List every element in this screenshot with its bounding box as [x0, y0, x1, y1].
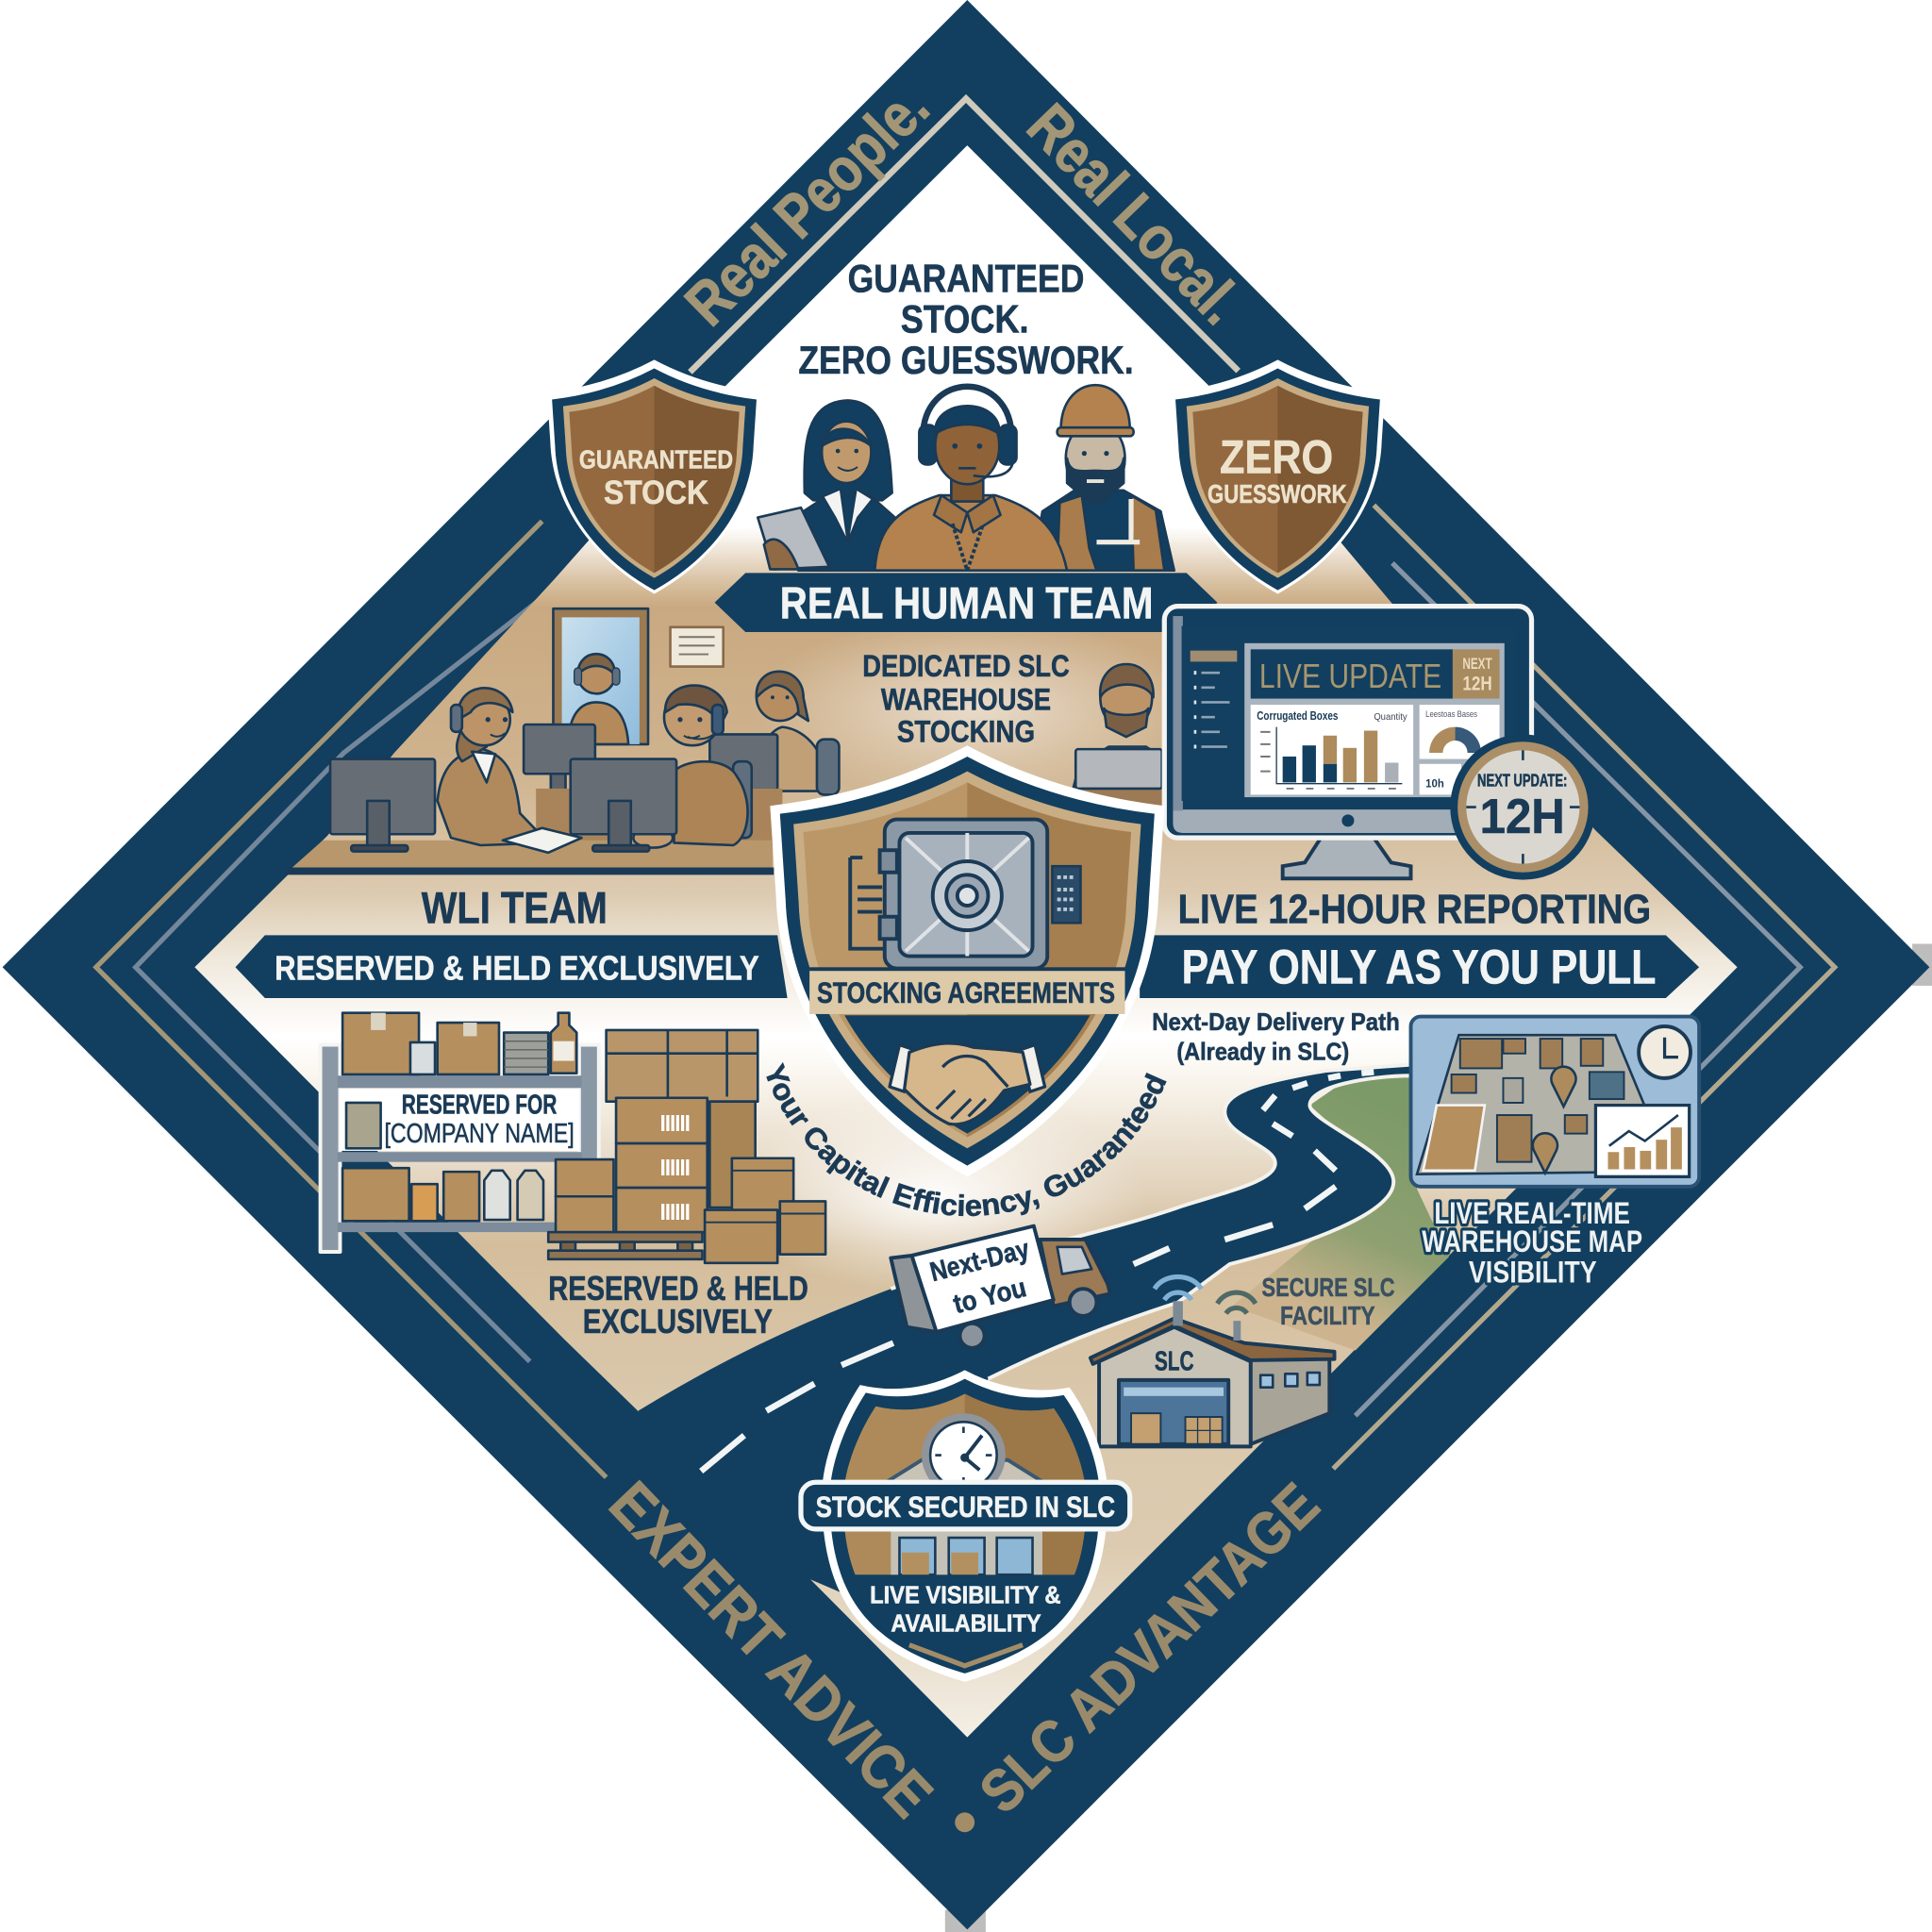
- shield: zero guesswork: [1171, 359, 1385, 594]
- building and clock: [882, 1460, 1047, 1516]
- grey stubs at edges: [945, 943, 1932, 1932]
- label: reserved and held exclusively: RESERVED & HELD: [548, 1269, 808, 1307]
- live visibility text: [870, 1580, 1061, 1637]
- stocking agreements strip: STOCKING AGREEMENTS: [817, 976, 1115, 1009]
- worker with hard hat: [1033, 385, 1174, 571]
- frame: chevron stripes: [96, 98, 1835, 1477]
- label: dedicated SLC warehouse stocking: DEDICATED SLC: [862, 648, 1070, 683]
- next update clock: [1450, 734, 1595, 880]
- label: next-day delivery path: [1152, 1008, 1400, 1065]
- truck label: [927, 1234, 1032, 1320]
- small stat: 10h: [1425, 778, 1444, 791]
- barcodes: [663, 1115, 688, 1220]
- back monitor left: [524, 724, 595, 805]
- live update readout: LIVE UPDATE: [1259, 657, 1441, 695]
- back woman: [753, 672, 839, 794]
- label: reserved and held exclusively: EXCLUSIVELY: [583, 1302, 773, 1341]
- shelf frame: [321, 1045, 599, 1252]
- reserved label: [COMPANY NAME]: [385, 1119, 575, 1149]
- label: dedicated SLC warehouse stocking: [862, 648, 1070, 748]
- person with laptop: [1067, 664, 1173, 813]
- title: [798, 257, 1134, 382]
- label: dedicated SLC warehouse stocking: WAREHOUSE: [881, 681, 1051, 716]
- truck label: Next-Day: [927, 1234, 1032, 1288]
- tan crest: [845, 1394, 1085, 1575]
- central shield: stocking agreements: [770, 745, 1164, 1176]
- green field: [1232, 1072, 1449, 1351]
- trend chart: [1595, 1106, 1690, 1176]
- gauge: [1425, 709, 1481, 753]
- woman with tablet: [758, 400, 902, 571]
- live visibility text: LIVE VISIBILITY &: [870, 1580, 1061, 1608]
- bar chart: corrugated boxes: [1257, 708, 1407, 789]
- curved slogan: Your Capital Efficiency, Guaranteed: [766, 1062, 1167, 1217]
- shelf goods: [342, 1013, 576, 1221]
- bottom shield: stock secured in SLC: [801, 1370, 1130, 1682]
- label: live 12-hour reporting: LIVE 12-HOUR REPORTING: [1178, 887, 1651, 932]
- banner: reserved and held exclusively: [235, 935, 788, 998]
- SLC warehouse building: [1091, 1319, 1335, 1446]
- separator dot: [955, 1812, 974, 1832]
- frame text: SLC Advantage: SLC ADVANTAGE: [968, 1471, 1332, 1825]
- notice board: [671, 627, 724, 667]
- shelving: reserved stock: [321, 1013, 825, 1263]
- desk: [286, 789, 782, 874]
- label: secure SLC facility: [1261, 1273, 1395, 1330]
- next 12h readout: 12H: [1462, 673, 1492, 694]
- SLC warehouse building: SLC: [1155, 1346, 1194, 1376]
- monitor dashboard: [1164, 607, 1532, 878]
- frame text: Real Local.: Real Local.: [1014, 91, 1256, 337]
- keypad: [1052, 866, 1080, 923]
- label: live real-time warehouse map visibility: VISIBILITY: [1469, 1255, 1597, 1290]
- wall clock: [1639, 1026, 1690, 1078]
- front monitor right: [571, 759, 676, 852]
- frame text: Real People.: Real People.: [672, 72, 941, 339]
- label: next-day delivery path: Next-Day Delivery Path: [1152, 1008, 1400, 1036]
- chevron: [909, 1645, 1023, 1666]
- truck label: to You: [951, 1273, 1029, 1320]
- label: live real-time warehouse map visibility: [1422, 1195, 1642, 1290]
- illustration: three team members: [758, 385, 1174, 571]
- vault door: [880, 820, 1047, 969]
- frame text: Expert Advice: EXPERT ADVICE: [596, 1469, 945, 1830]
- reserved label: [340, 1090, 579, 1151]
- live visibility text: AVAILABILITY: [891, 1608, 1041, 1637]
- panel: warehouse map: [1411, 1017, 1699, 1187]
- shield: guaranteed stock: STOCK: [604, 475, 709, 511]
- next update clock: NEXT UPDATE:: [1477, 770, 1567, 790]
- stock secured badge: [801, 1482, 1130, 1529]
- woman at desk: [438, 688, 581, 853]
- stock secured badge: STOCK SECURED IN SLC: [816, 1491, 1115, 1524]
- stocking agreements strip: [809, 967, 1124, 1014]
- banner: pay only as you pull: PAY ONLY AS YOU PULL: [1182, 940, 1656, 993]
- bar chart: corrugated boxes: Corrugated Boxes: [1257, 708, 1338, 723]
- label: secure SLC facility: SECURE SLC: [1261, 1273, 1395, 1302]
- bar chart: corrugated boxes: Quantity: [1374, 712, 1407, 723]
- shield: guaranteed stock: GUARANTEED: [579, 444, 733, 474]
- pallet stack: [548, 1030, 825, 1263]
- label: secure SLC facility: FACILITY: [1280, 1301, 1375, 1330]
- label: dedicated SLC warehouse stocking: STOCKING: [897, 713, 1035, 748]
- side panel: [850, 858, 885, 949]
- shield: zero guesswork: GUESSWORK: [1208, 479, 1347, 508]
- next update clock: 12H: [1480, 790, 1565, 844]
- navy lower field: [844, 1015, 1091, 1134]
- label: live real-time warehouse map visibility: WAREHOUSE MAP: [1422, 1224, 1642, 1258]
- front monitor left: [330, 759, 435, 852]
- illustration: WLI office team: [286, 608, 839, 874]
- office window: [553, 608, 648, 744]
- next 12h readout: NEXT: [1462, 655, 1492, 673]
- next 12h readout: [1462, 655, 1492, 694]
- handshake icon: [890, 1043, 1045, 1124]
- label: WLI team: WLI TEAM: [422, 882, 608, 932]
- back monitor right: [709, 734, 777, 790]
- banner: real human team: REAL HUMAN TEAM: [780, 578, 1154, 628]
- title: STOCK.: [901, 297, 1029, 341]
- title: GUARANTEED: [848, 257, 1084, 301]
- man at desk: [633, 686, 752, 848]
- windows: [891, 1532, 1042, 1574]
- title: ZERO GUESSWORK.: [798, 338, 1134, 382]
- man with headset: [874, 387, 1067, 571]
- shield: zero guesswork: ZERO: [1220, 431, 1333, 484]
- gauge: Leestoas Bases: [1425, 709, 1477, 719]
- icon: wifi signals: [1155, 1276, 1256, 1341]
- reserved label: RESERVED FOR: [402, 1091, 558, 1121]
- delivery road: [639, 1064, 1412, 1602]
- background highlights: [727, 616, 1195, 1293]
- inner diamond background: [194, 145, 1738, 1738]
- label: reserved and held exclusively: [548, 1269, 808, 1341]
- shield: guaranteed stock: [547, 359, 761, 594]
- banner: reserved and held exclusively: RESERVED & HELD EXCLUSIVELY: [275, 948, 759, 987]
- label: live real-time warehouse map visibility: LIVE REAL-TIME: [1434, 1195, 1630, 1230]
- delivery truck: [891, 1226, 1110, 1348]
- label: next-day delivery path: (Already in SLC): [1176, 1037, 1349, 1065]
